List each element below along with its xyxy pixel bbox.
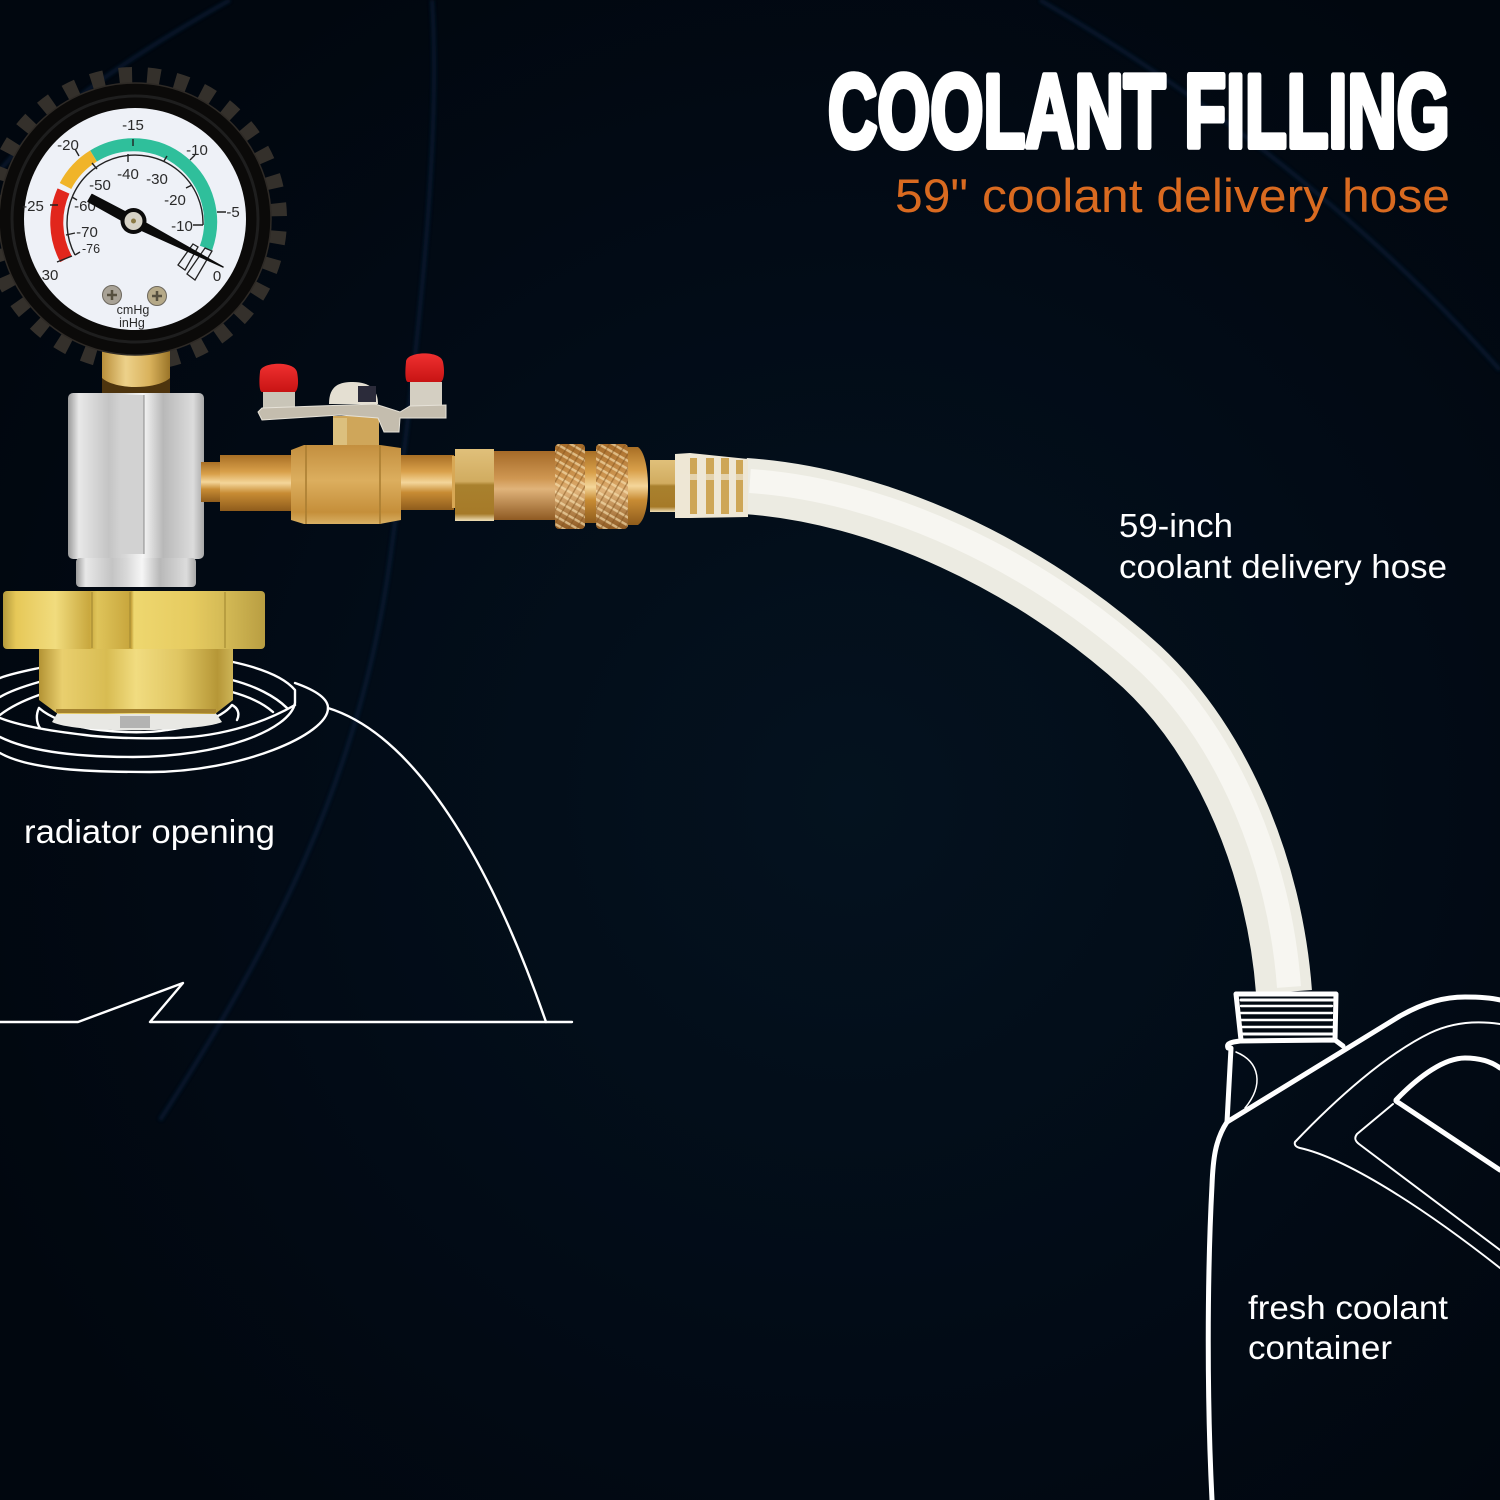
gauge numbers: -60: [74, 198, 96, 215]
gauge numbers: 0: [213, 268, 221, 285]
gauge needle: [88, 194, 223, 267]
quick coupler: [452, 444, 748, 529]
gauge zero zone marks: [178, 244, 212, 280]
container body and handle: [1208, 1048, 1231, 1500]
valve handle with red caps: [258, 353, 446, 432]
gauge numbers: -25: [22, 198, 44, 215]
gauge numbers: -50: [89, 177, 111, 194]
coupler body: [494, 451, 555, 520]
label: fresh coolant container: fresh coolant: [1248, 1289, 1448, 1326]
gauge numbers: cmHg: [117, 303, 149, 317]
subtitle: 59" coolant delivery hose: [895, 169, 1450, 222]
label: 59-inch coolant delivery hose: [1119, 507, 1447, 585]
gauge colour arcs: [57, 145, 211, 259]
barb with ribs: [675, 453, 748, 518]
label: fresh coolant container: [1248, 1289, 1448, 1366]
label: fresh coolant container: container: [1248, 1329, 1392, 1366]
vacuum gauge: [0, 76, 278, 393]
coolant delivery hose: [745, 481, 1289, 992]
radiator adapter brass nut: [3, 591, 265, 730]
brass stem under gauge: [102, 340, 170, 393]
title: COOLANT FILLING: [828, 53, 1450, 169]
silver fitting body: [68, 393, 204, 587]
container cap and neck: [1228, 994, 1343, 1048]
hex nut: [455, 449, 494, 521]
gauge numbers: -20: [164, 192, 186, 209]
gauge numbers: -10: [171, 218, 193, 235]
radiator body curve: [328, 708, 546, 1022]
gauge rubber teeth: [0, 76, 278, 362]
gauge screws: [102, 286, 166, 306]
radiator base line: [0, 983, 572, 1022]
gauge numbers: -70: [76, 224, 98, 241]
gauge rubber bezel: [0, 83, 271, 355]
gauge scale arc and ticks: [50, 139, 226, 262]
gauge numbers: -30: [146, 171, 168, 188]
label: 59-inch coolant delivery hose: coolant delivery hose: [1119, 548, 1447, 585]
gauge numbers: -5: [226, 204, 240, 221]
gauge numbers: inHg: [119, 316, 145, 330]
gauge numbers: 30: [42, 267, 58, 284]
gauge numbers: [22, 117, 240, 330]
gauge face: [24, 108, 246, 330]
small hex: [650, 460, 676, 512]
label: radiator opening: radiator opening: [24, 814, 275, 851]
gauge numbers: -10: [186, 142, 208, 159]
gauge numbers: -20: [57, 137, 79, 154]
ball valve and brass tube: [201, 416, 454, 524]
gauge numbers: -40: [117, 166, 139, 183]
gauge numbers: -76: [82, 242, 100, 256]
label: 59-inch coolant delivery hose: 59-inch: [1119, 507, 1233, 544]
gauge numbers: -15: [122, 117, 144, 134]
radiator filler neck rings: [0, 662, 328, 772]
fresh coolant container outline: [1208, 994, 1500, 1500]
knurled rings: [555, 444, 648, 529]
diagram: radiator opening outline: [0, 662, 572, 1022]
